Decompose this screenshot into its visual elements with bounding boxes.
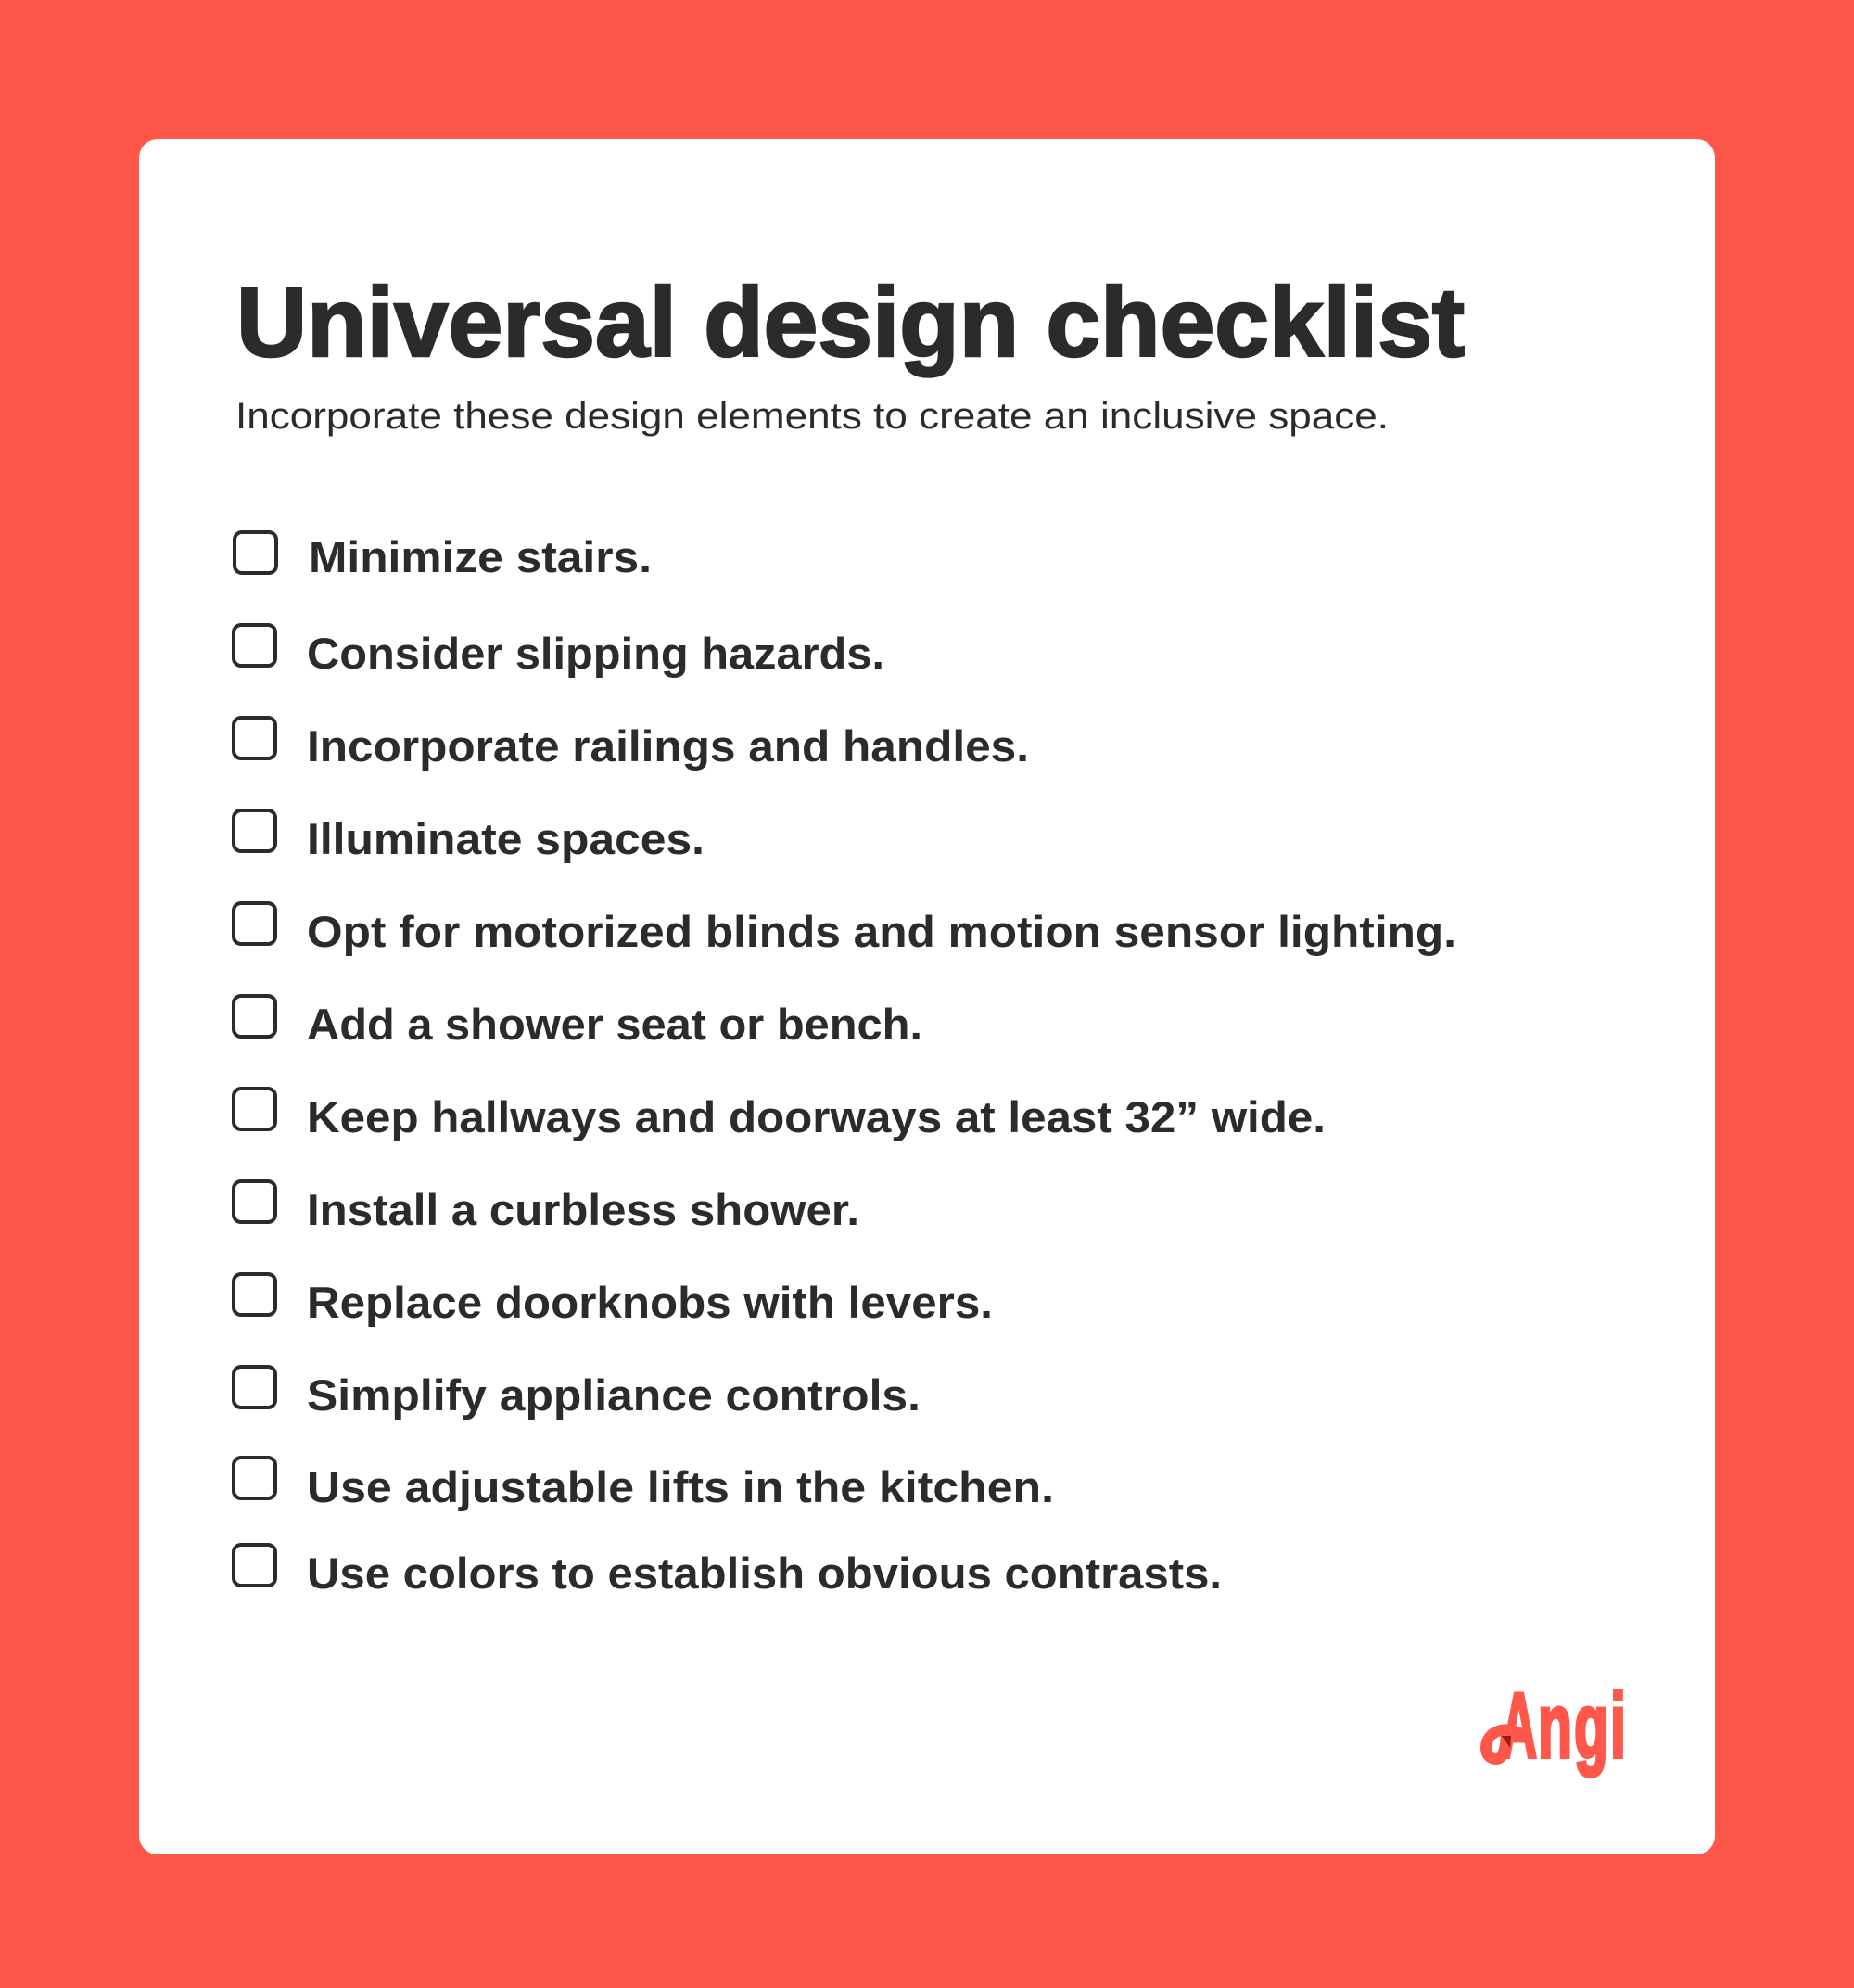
- checklist item: hallways and doorways: Keep hallways and doorways at least 32” wide.: [307, 1092, 1326, 1141]
- checklist item: slipping hazards: Consider slipping hazards.: [307, 629, 884, 678]
- subtitle: Incorporate these design elements to create an inclusive space.: [235, 396, 1389, 437]
- checklist item: curbless shower: Install a curbless shower.: [307, 1185, 859, 1234]
- checklist item: doorknobs: Replace doorknobs with levers.: [307, 1278, 993, 1327]
- logo: Angi: i: [1610, 1674, 1626, 1777]
- logo: Angi: A: [1501, 1674, 1537, 1777]
- checklist item: appliance controls: Simplify appliance controls.: [307, 1370, 921, 1420]
- checklist item: shower seat: Add a shower seat or bench.: [307, 1000, 922, 1049]
- checklist: [234, 532, 1456, 1598]
- panel: checklist card: [139, 139, 1715, 1854]
- checklist item: motorized blinds: Opt for motorized blinds and motion sensor lighting.: [307, 907, 1456, 956]
- checklist item: adjustable lifts: Use adjustable lifts in the kitchen.: [307, 1462, 1054, 1511]
- logo: Angi: g: [1574, 1674, 1608, 1777]
- checklist item: illuminate spaces: Illuminate spaces.: [307, 814, 705, 863]
- title: Universal design checklist: [236, 268, 1465, 377]
- checklist item: colors: Use colors to establish obvious contrasts.: [307, 1548, 1222, 1598]
- checklist item: railings and handles: Incorporate railings and handles.: [307, 721, 1029, 771]
- logo: Angi: n: [1538, 1674, 1572, 1777]
- checklist item: minimize stairs: Minimize stairs.: [309, 532, 652, 581]
- logo: Angi: [1486, 1674, 1626, 1777]
